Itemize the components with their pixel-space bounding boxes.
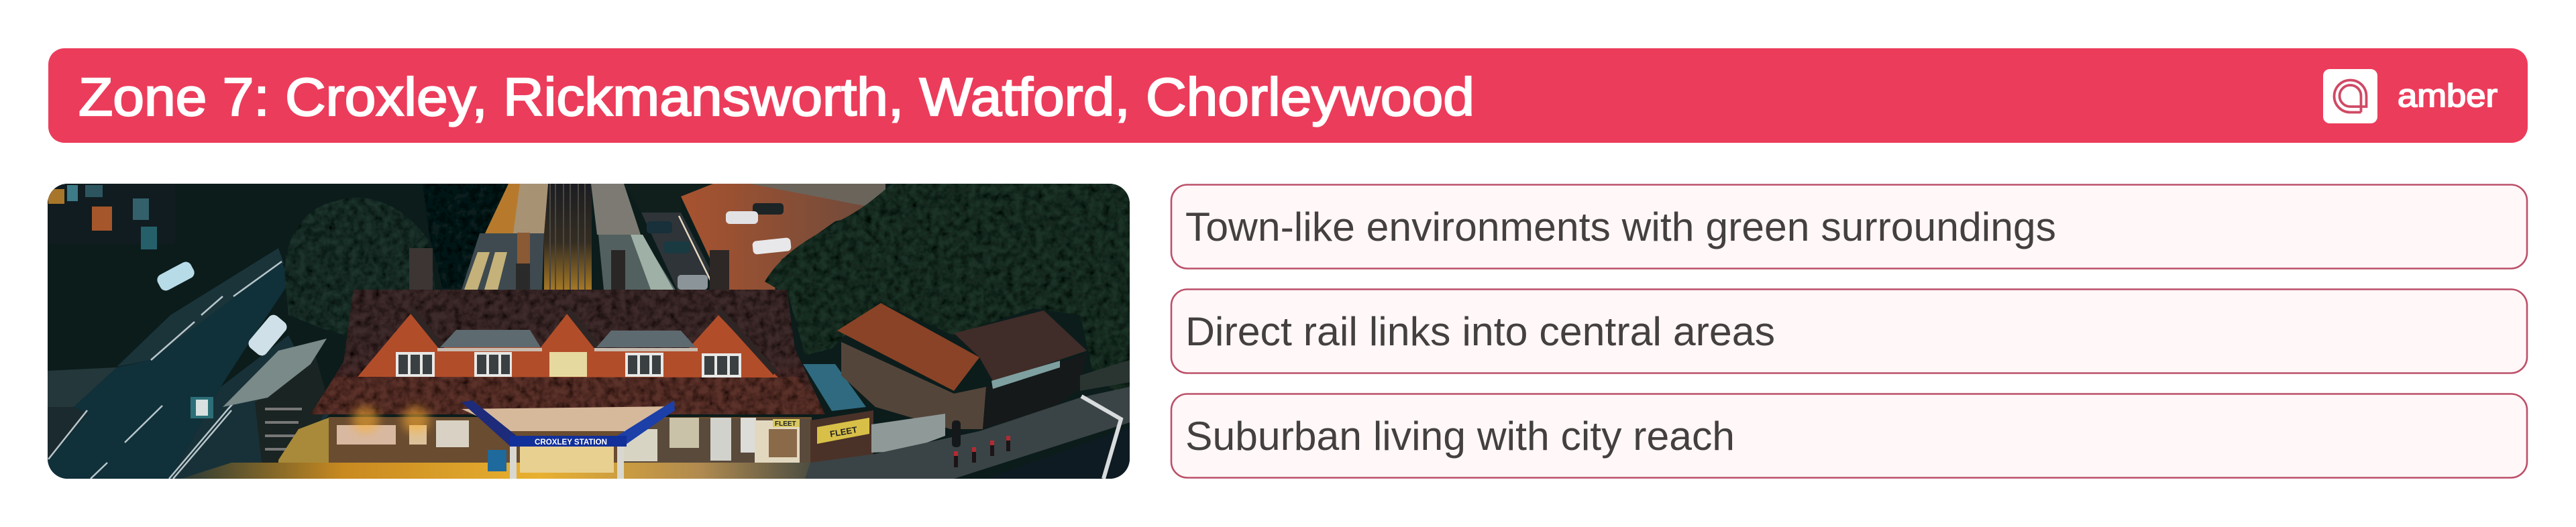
metal fence bbox=[871, 414, 945, 453]
road markings bbox=[48, 261, 282, 479]
icon: amber logo mark bbox=[2323, 69, 2377, 123]
central tree bbox=[284, 198, 436, 337]
platform canopies bbox=[462, 233, 676, 290]
dark trees by the platform bbox=[423, 184, 510, 288]
lit shop windows bbox=[337, 406, 469, 447]
street lamp bbox=[1081, 396, 1121, 479]
platforms bbox=[485, 184, 641, 235]
corner verge bbox=[48, 407, 88, 461]
card: green surroundings bbox=[1171, 185, 2527, 268]
chimneys bbox=[409, 233, 729, 290]
person on pavement bbox=[952, 420, 961, 447]
road bottom right bbox=[1110, 459, 1130, 479]
pavement beside shelter bbox=[170, 335, 329, 479]
card: suburban living bbox=[1171, 394, 2527, 477]
brick ground floor bbox=[329, 417, 812, 463]
card: rail links: Direct rail links into central areas bbox=[1185, 309, 1775, 354]
brick gables and wall bbox=[358, 310, 778, 377]
block of flats top left bbox=[48, 184, 157, 249]
blue door bbox=[488, 450, 506, 471]
card: green surroundings: Town-like environments with green surroundings bbox=[1185, 204, 2056, 249]
railway tracks bbox=[544, 184, 592, 291]
parking sign bbox=[191, 397, 213, 418]
lower roof warm band bbox=[311, 377, 825, 414]
station canopy bbox=[462, 400, 675, 479]
card: rail links bbox=[1171, 290, 2527, 373]
right shopfront: FLEET bbox=[775, 420, 796, 428]
brick wall with FLEET yellow sign: FLEET bbox=[829, 424, 858, 439]
header banner bbox=[48, 48, 2528, 143]
title: Zone 7: Croxley, Rickmansworth, Watford, Chorleywood bbox=[78, 67, 1474, 127]
far fence bbox=[1080, 360, 1130, 391]
lower left pavement bbox=[48, 367, 117, 407]
big tree right bbox=[765, 184, 1130, 402]
lit paving beside building bbox=[278, 418, 329, 463]
right shopfront bbox=[624, 418, 812, 463]
logo wordmark: amber bbox=[2398, 78, 2498, 114]
dormer roofs bbox=[437, 330, 698, 351]
brick wall with FLEET yellow sign bbox=[810, 410, 873, 463]
main roof bbox=[311, 290, 825, 414]
right brick building bbox=[837, 303, 1087, 429]
bike shelter bbox=[223, 339, 329, 463]
bollards bbox=[956, 436, 1008, 467]
car park bbox=[624, 184, 885, 290]
parked cars on the road bbox=[155, 259, 289, 358]
forecourt glow bbox=[181, 463, 832, 479]
photo: Croxley station at dusk bbox=[48, 184, 1130, 479]
station name sign: CROXLEY STATION bbox=[535, 437, 607, 447]
flat blue roof bbox=[803, 364, 866, 411]
amber logo bbox=[2323, 69, 2498, 123]
card: suburban living: Suburban living with city reach bbox=[1185, 414, 1735, 459]
pavement bottom right bbox=[805, 387, 1130, 479]
pavement beside hedge bbox=[117, 248, 284, 367]
road bbox=[48, 261, 290, 479]
upper windows bbox=[396, 352, 741, 377]
